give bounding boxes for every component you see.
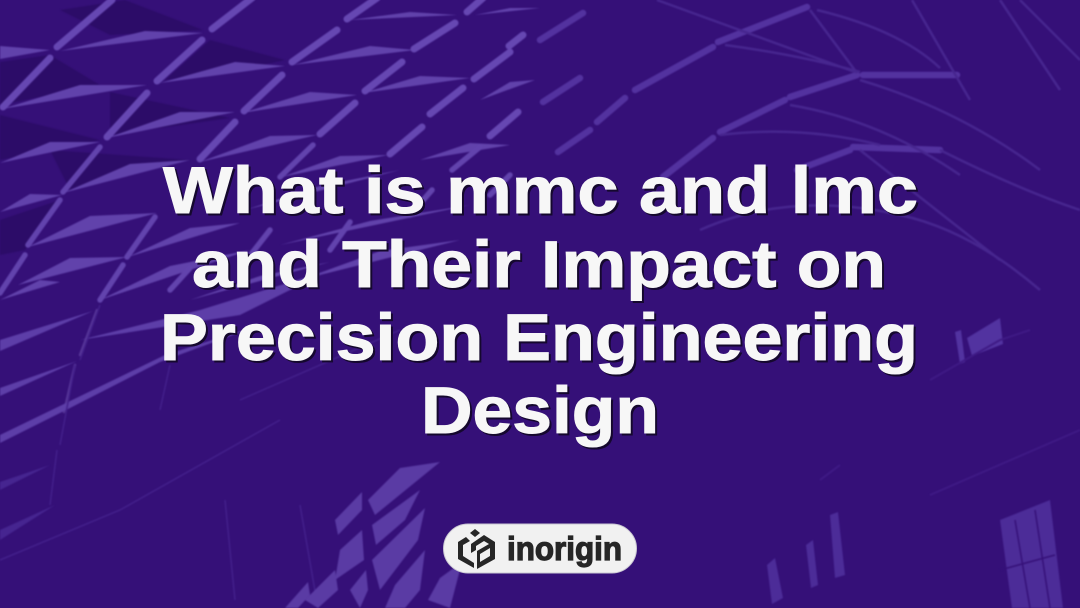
title: four centred lines: Design <box>421 373 659 447</box>
icon: inorigin hexagon mark <box>458 529 495 569</box>
title: four centred lines: What is mmc and lmc <box>163 153 918 227</box>
logo wordmark: inorigin <box>507 530 622 567</box>
title: four centred lines: Precision Engineering <box>160 300 918 374</box>
logo: inorigin pill badge <box>444 524 636 573</box>
title: four centred lines <box>160 153 918 447</box>
title: four centred lines: and Their Impact on <box>192 227 886 301</box>
